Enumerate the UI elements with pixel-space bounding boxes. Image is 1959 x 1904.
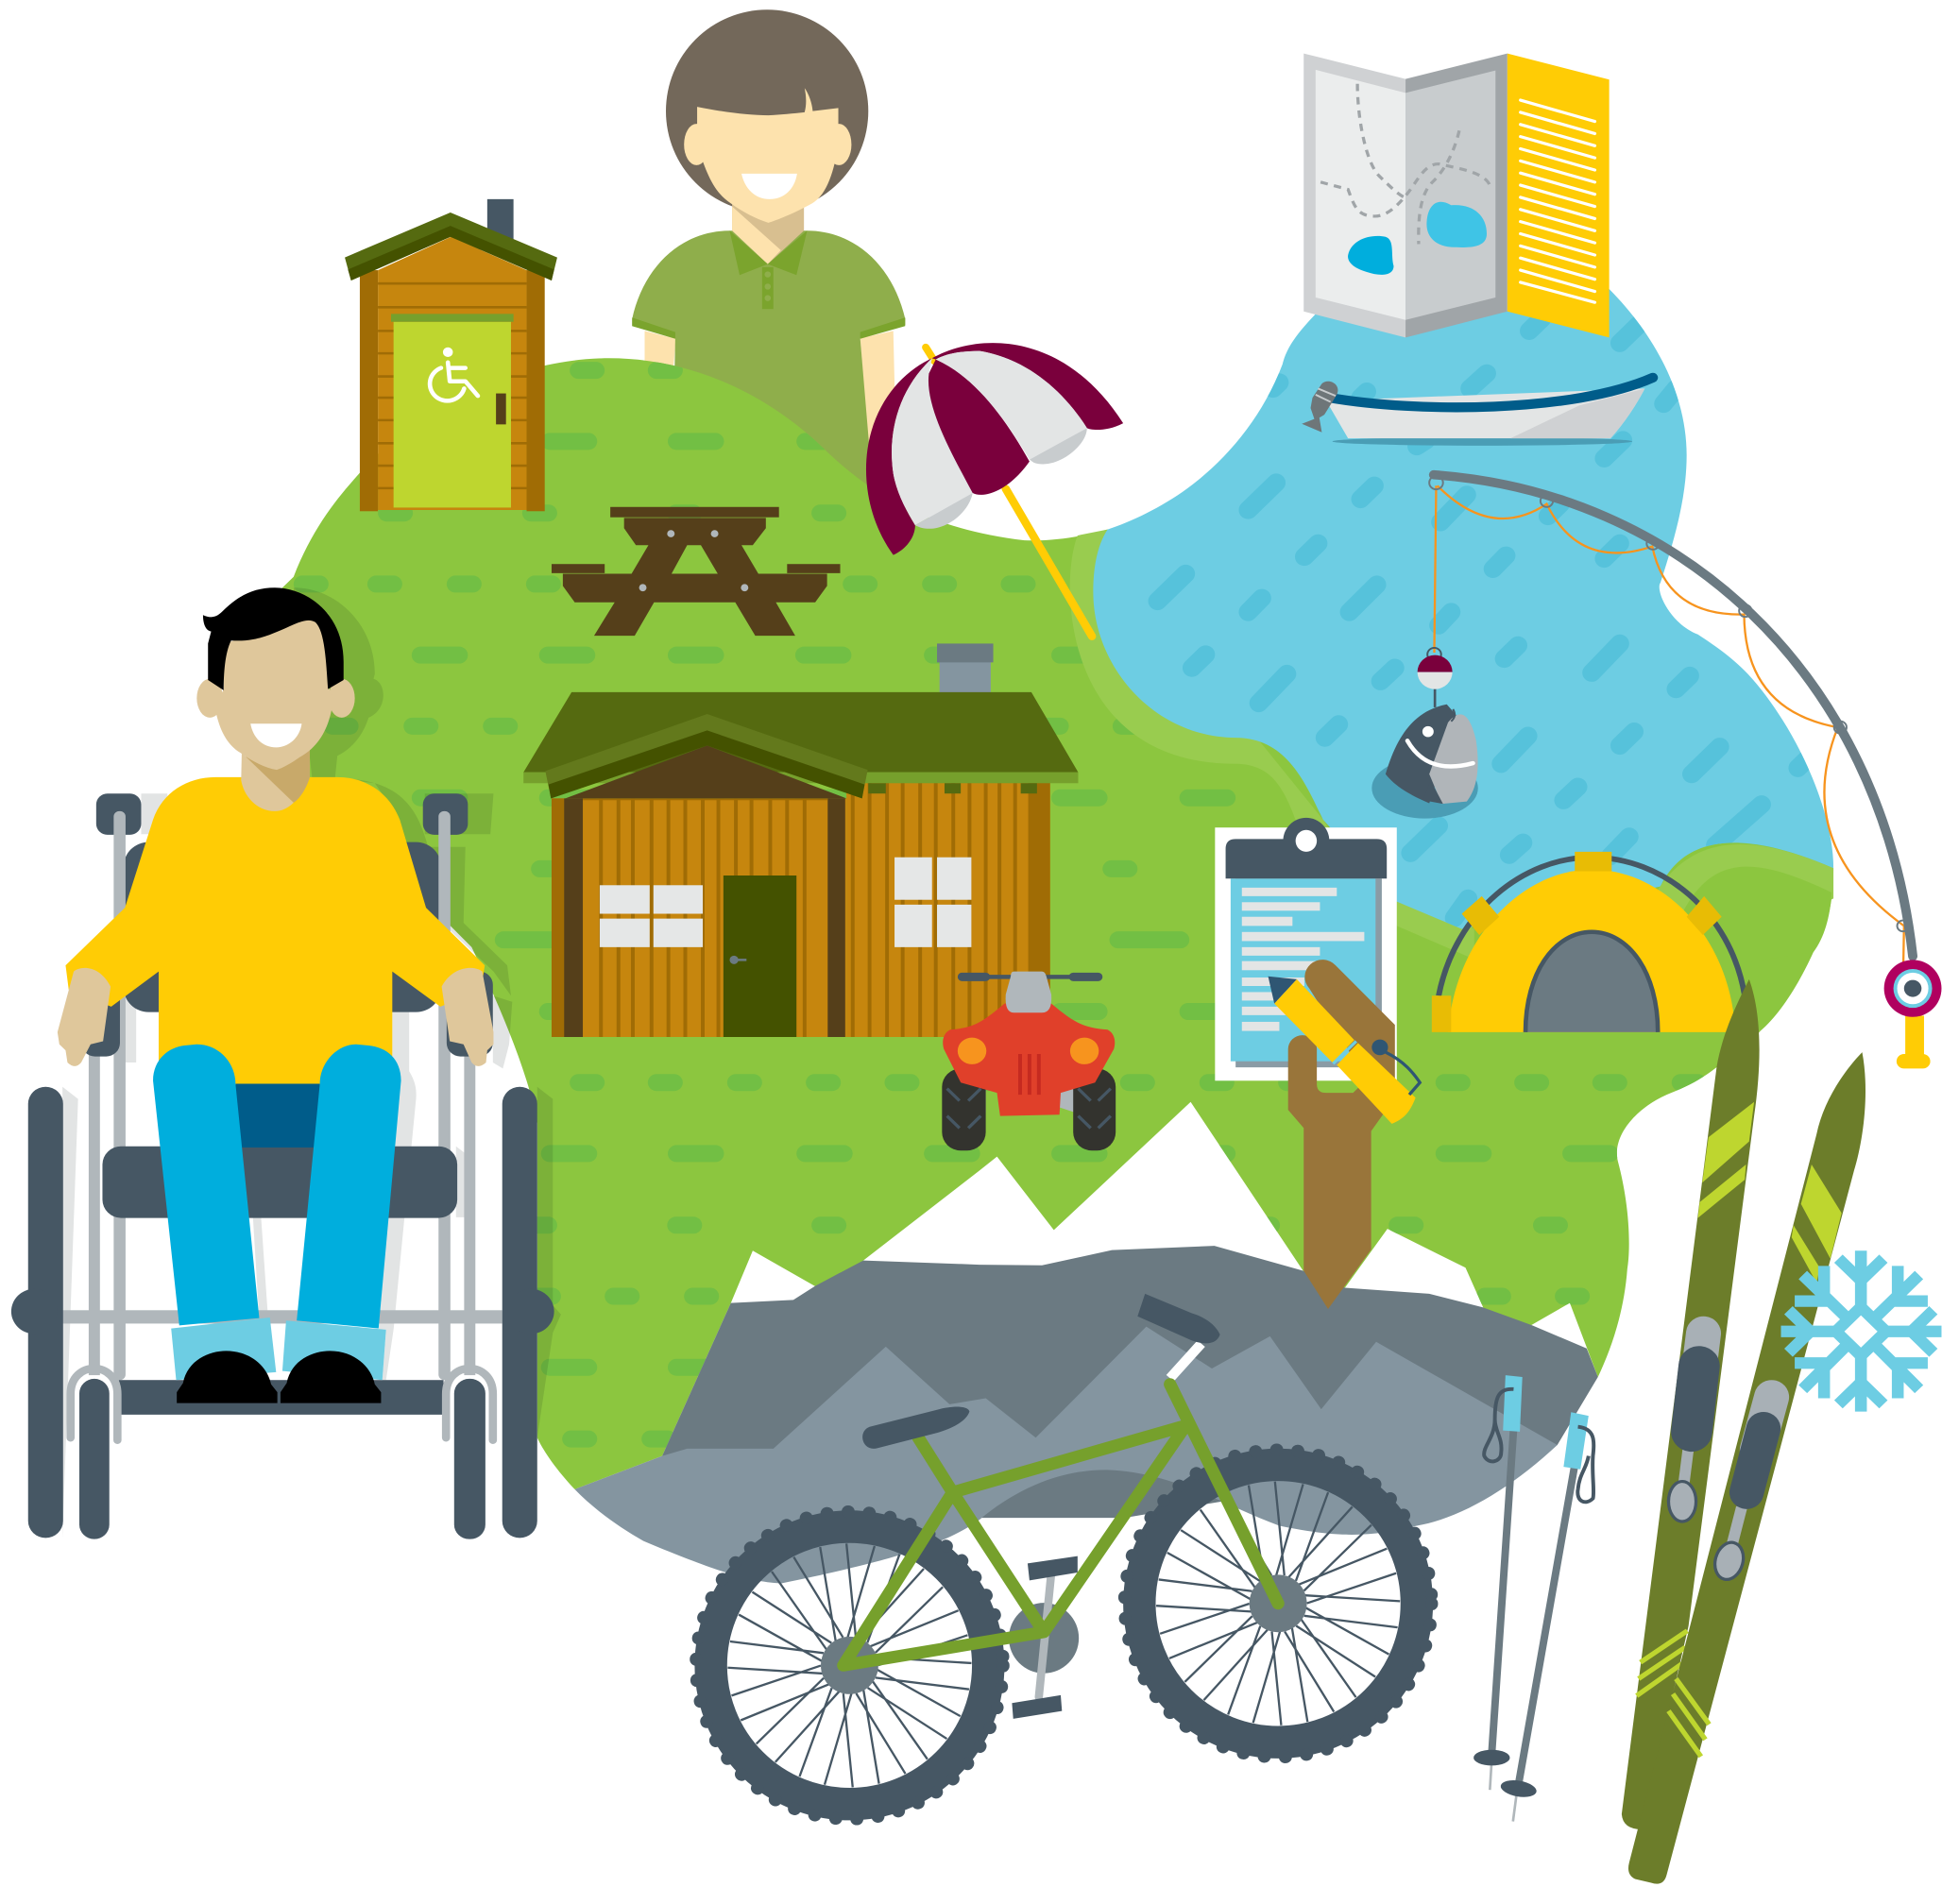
- outhouse: [345, 199, 557, 511]
- front wheel: [1124, 1450, 1432, 1758]
- wheels: [11, 1087, 554, 1539]
- picnic table: [552, 507, 841, 636]
- cuffs: [171, 1318, 386, 1380]
- mountains: [574, 1246, 1598, 1584]
- head: [196, 587, 355, 770]
- chimney: [937, 643, 994, 695]
- chainring and cranks: [1009, 1556, 1079, 1719]
- handlebar: [962, 974, 1099, 980]
- roof: [523, 692, 1078, 798]
- clipboard: [1215, 818, 1397, 1080]
- wheelchair: [11, 793, 554, 1539]
- mudguards: [963, 1089, 1077, 1113]
- frame: [843, 1385, 1278, 1665]
- hands: [58, 968, 493, 1066]
- saddle: [862, 1407, 969, 1449]
- rowing boat: [1302, 378, 1653, 446]
- seat post: [1170, 1344, 1201, 1378]
- armrests: [81, 972, 493, 1057]
- wheelchair user shadow: [62, 587, 561, 1538]
- footrest: [119, 1380, 444, 1415]
- fishing line and float: [1418, 476, 1908, 995]
- frame tubes: [62, 811, 503, 1380]
- door: [724, 876, 796, 1037]
- fish: [1371, 705, 1478, 819]
- roof: [345, 212, 557, 280]
- backrest and handles: [96, 793, 468, 1012]
- fishing rod: [1434, 475, 1941, 1068]
- icon: snowflake: [1781, 1250, 1941, 1412]
- shirt: [65, 777, 485, 1084]
- handlebar: [1137, 1294, 1220, 1343]
- shoes: [177, 1351, 381, 1403]
- ski two: [1628, 1052, 1865, 1884]
- pole two: [1499, 1412, 1593, 1822]
- reel: [1884, 960, 1941, 1068]
- wheelchair user: [58, 587, 493, 1403]
- body: [943, 1004, 1115, 1116]
- door: [391, 314, 514, 507]
- ski poles: [1474, 1375, 1593, 1822]
- fold-out map: [1303, 54, 1610, 337]
- hill beside tent: [1649, 844, 1833, 972]
- seat: [102, 1147, 457, 1218]
- rear wheel: [696, 1512, 1003, 1819]
- legs: [153, 1045, 401, 1329]
- ski one: [1622, 979, 1760, 1829]
- fuel tank: [1006, 972, 1051, 1012]
- lake: [1093, 285, 1833, 929]
- cabin: [523, 643, 1078, 1037]
- trousers: [235, 1084, 320, 1148]
- hand holding pencil signpost: [1269, 960, 1420, 1309]
- tent: [1432, 852, 1745, 1032]
- fork arches: [71, 1368, 493, 1440]
- tyres: [942, 1068, 1116, 1150]
- pole one: [1474, 1375, 1523, 1790]
- skis: [1622, 979, 1865, 1884]
- windows: [600, 858, 971, 947]
- pencil: [1269, 977, 1420, 1124]
- headlights: [1070, 1038, 1099, 1064]
- neck: [242, 747, 310, 803]
- lake shoreline strip: [1070, 530, 1474, 960]
- beach umbrella: [866, 343, 1123, 637]
- walls: [552, 782, 1050, 1037]
- quad bike: [942, 972, 1116, 1150]
- green land: [263, 358, 1833, 1489]
- mountain bike: [696, 1294, 1432, 1819]
- person in green shirt: [632, 9, 905, 510]
- icon: accessible toilet symbol: [430, 348, 478, 400]
